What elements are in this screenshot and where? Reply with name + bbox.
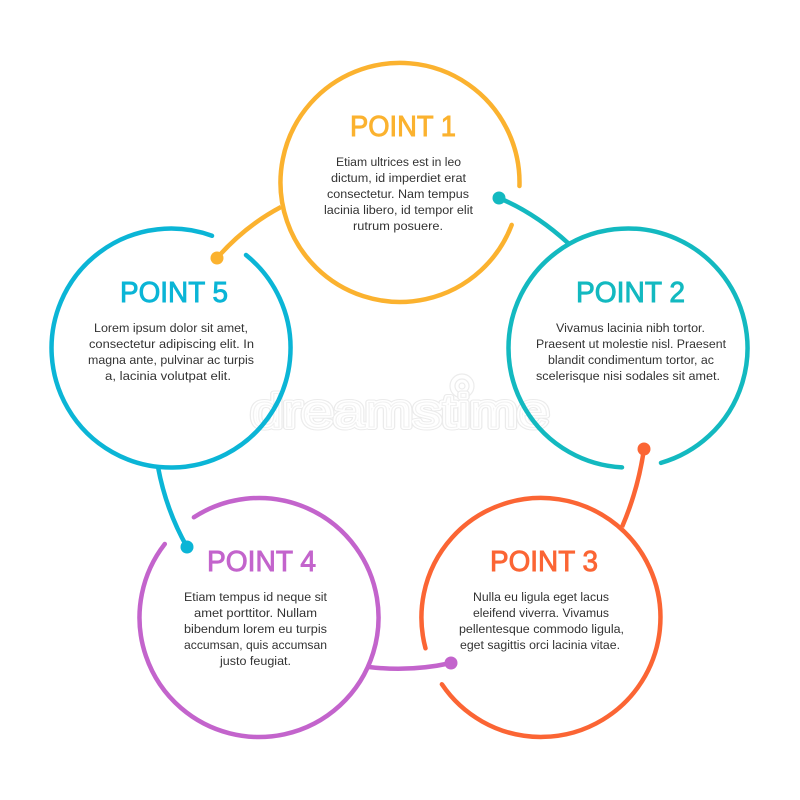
- connector: point 2 to point 3: [622, 442, 650, 527]
- panel: point 1: [281, 63, 520, 302]
- panel: point 4: [140, 498, 379, 737]
- connector: point 4 to point 5: [158, 467, 194, 554]
- text: point 5: Lorem ipsum dolor sit amet,: [94, 321, 248, 335]
- text: point 1: lacinia libero, id tempor elit: [324, 203, 474, 217]
- heading: point 5: POINT 5: [120, 277, 228, 309]
- text: point 5: a, lacinia volutpat elit.: [105, 369, 231, 383]
- text: point 2: Praesent ut molestie nisl. Praesent: [536, 337, 727, 351]
- text: point 5: [88, 321, 254, 383]
- watermark: [251, 374, 549, 437]
- text: point 1: Etiam ultrices est in leo: [336, 155, 461, 169]
- ring: point 1: [281, 63, 520, 302]
- text: point 4: justo feugiat.: [219, 654, 291, 668]
- text: point 2: Vivamus lacinia nibh tortor.: [556, 321, 705, 335]
- ring: point 5: [52, 229, 291, 468]
- text: point 1: [324, 155, 474, 233]
- text: point 3: pellentesque commodo ligula,: [459, 622, 624, 636]
- text: point 3: Nulla eu ligula eget lacus: [473, 590, 609, 604]
- text: point 4: accumsan, quis accumsan: [184, 638, 327, 652]
- text: point 4: bibendum lorem eu turpis: [184, 622, 327, 636]
- text: point 3: eget sagittis orci lacinia vitae.: [460, 638, 620, 652]
- heading: point 4: POINT 4: [207, 546, 316, 578]
- text: point 2: [536, 321, 727, 383]
- text: point 3: [459, 590, 624, 652]
- text: point 4: [184, 590, 328, 668]
- text: point 5: consectetur adipiscing elit. In: [89, 337, 254, 351]
- watermark: dreamstime: [251, 385, 549, 437]
- ring: point 2: [508, 229, 747, 467]
- heading: point 1: POINT 1: [350, 111, 456, 143]
- panel: point 2: [508, 229, 747, 467]
- text: point 2: scelerisque nisi sodales sit amet.: [536, 369, 720, 383]
- watermark: dreamstime: [251, 385, 549, 437]
- heading: point 2: POINT 2: [576, 277, 685, 309]
- heading: point 3: POINT 3: [490, 546, 598, 578]
- text: point 1: rutrum posuere.: [353, 219, 443, 233]
- text: point 5: magna ante, pulvinar ac turpis: [88, 353, 254, 367]
- text: point 1: dictum, id imperdiet erat: [331, 171, 467, 185]
- panel: point 5: [52, 229, 291, 468]
- connector: point 5 to point 1: [210, 207, 281, 264]
- ring: point 3: [421, 498, 660, 737]
- ring: point 4: [140, 498, 379, 737]
- connector: point 1 to point 2: [492, 192, 568, 243]
- text: point 4: amet porttitor. Nullam: [194, 606, 317, 620]
- text: point 2: blandit condimentum tortor, ac: [548, 353, 714, 367]
- text: point 4: Etiam tempus id neque sit: [184, 590, 328, 604]
- text: point 3: eleifend viverra. Vivamus: [473, 606, 609, 620]
- watermark: dreamstime: [251, 385, 549, 437]
- connector: point 3 to point 4: [369, 656, 458, 670]
- text: point 1: consectetur. Nam tempus: [327, 187, 469, 201]
- panel: point 3: [421, 498, 660, 737]
